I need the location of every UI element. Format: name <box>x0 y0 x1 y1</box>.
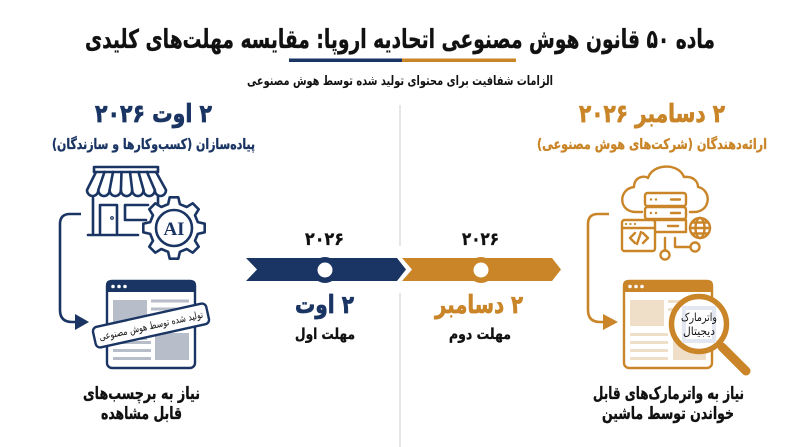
caption: machine-readable watermarks: خواندن توسط ماشین <box>602 404 734 424</box>
icon: storefront with AI gear: AI <box>163 219 185 240</box>
center divider <box>399 105 401 447</box>
title underline <box>289 58 516 62</box>
magnifier: واترمارک <box>681 310 717 325</box>
date: 2 August: ۲ اوت <box>295 290 354 320</box>
year: first deadline: ۲۰۲۶ <box>305 229 344 250</box>
ribbon: gold segment <box>402 258 561 281</box>
panel: deployers (left) <box>52 99 255 424</box>
caption: visible labels: قابل مشاهده <box>101 404 182 424</box>
subheading: deployers: پیاده‌سازان (کسب‌وکارها و سازندگان) <box>52 135 255 153</box>
ribbon: navy segment <box>246 258 406 281</box>
icon: cloud server and code <box>622 167 710 260</box>
caption: visible labels: نیاز به برچسب‌های <box>83 384 200 404</box>
timeline <box>246 229 561 343</box>
magnifier: دیجیتال <box>683 324 715 338</box>
caption: machine-readable watermarks <box>593 384 744 424</box>
panel: providers (right) <box>537 99 767 424</box>
subtitle: الزامات شفافیت برای محتوای تولید شده توسط هوش مصنوعی <box>247 74 553 89</box>
date: 2 December: ۲ دسامبر <box>433 290 523 320</box>
label: AI generated: تولید شده توسط هوش مصنوعی <box>98 310 204 343</box>
caption: visible labels <box>83 384 200 424</box>
marker: second deadline <box>468 257 494 283</box>
icon: storefront with AI gear <box>87 167 205 259</box>
icon: browser page with magnifier <box>623 280 746 371</box>
arrow: cloud to watermarked page <box>588 214 618 330</box>
marker: first deadline <box>312 257 338 283</box>
heading: 2 August 2026: ۲ اوت ۲۰۲۶ <box>95 99 212 129</box>
arrow: storefront to labelled page <box>60 214 89 330</box>
heading: 2 December 2026: ۲ دسامبر ۲۰۲۶ <box>579 99 725 129</box>
magnifier <box>672 296 746 371</box>
caption: second deadline: مهلت دوم <box>449 325 511 343</box>
caption: first deadline: مهلت اول <box>295 325 355 343</box>
icon: browser page with AI label <box>92 280 210 368</box>
year: second deadline: ۲۰۲۶ <box>462 229 499 250</box>
